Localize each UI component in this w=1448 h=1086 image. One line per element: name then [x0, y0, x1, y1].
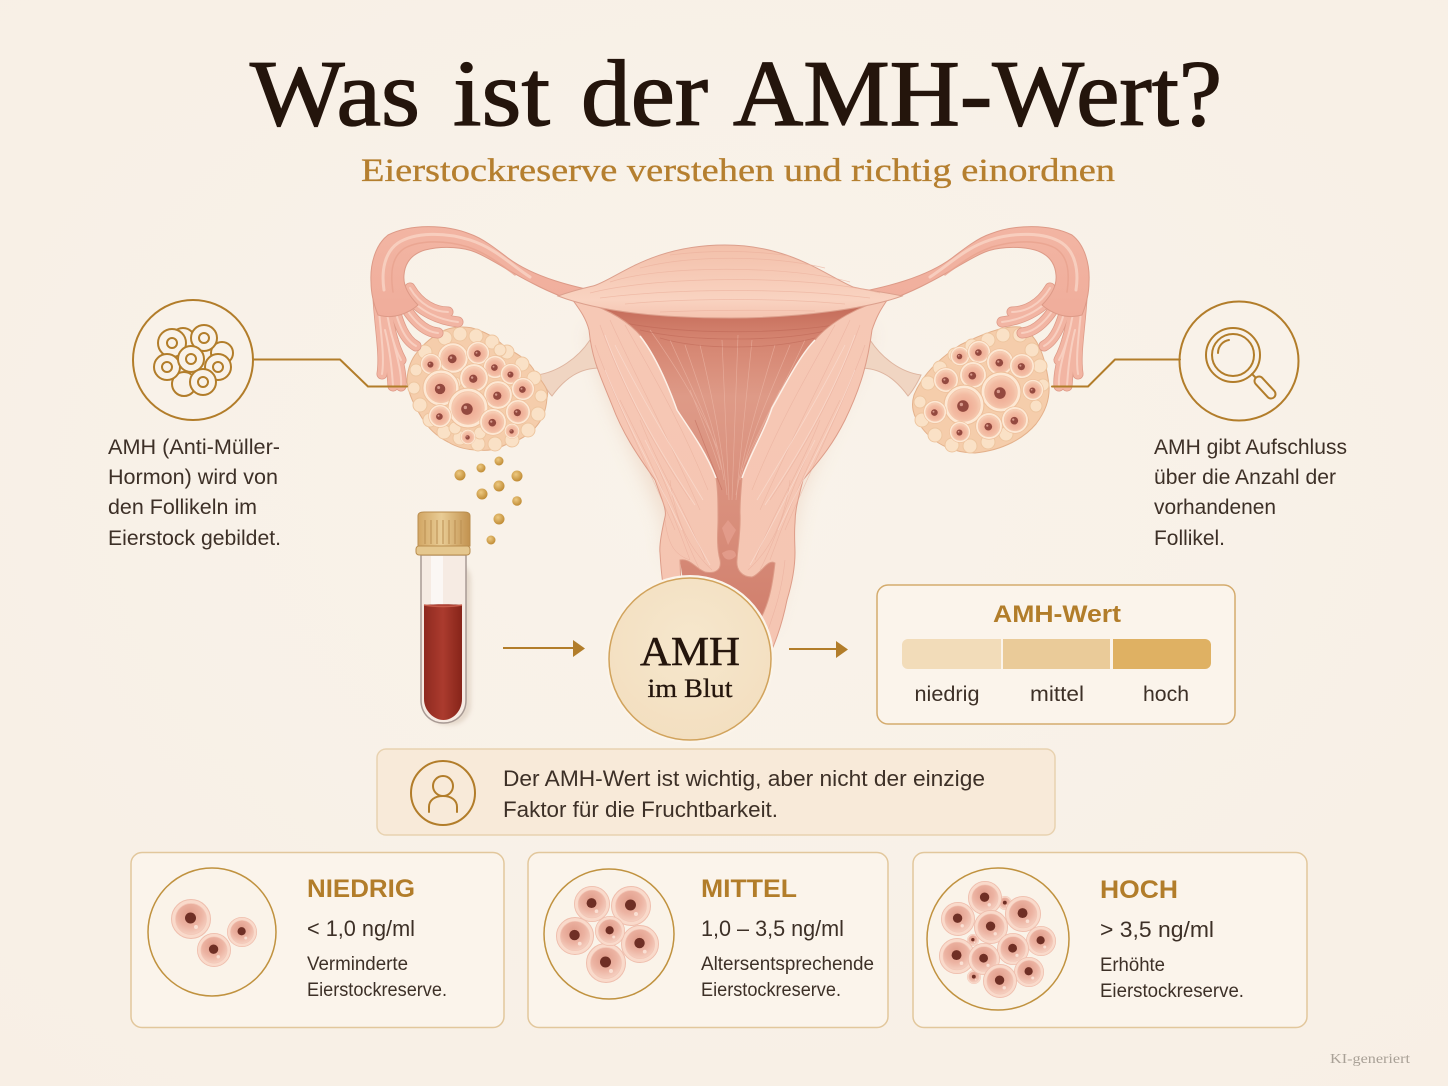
panel: hoch: Erhöhte	[1100, 955, 1165, 976]
panel: niedrig: Eierstockreserve.	[307, 980, 447, 1001]
left description	[108, 436, 281, 550]
left description: AMH (Anti-Müller-	[108, 436, 280, 459]
left description: den Follikeln im	[108, 496, 257, 519]
left fallopian tube	[371, 227, 600, 386]
panel: niedrig: < 1,0 ng/ml	[307, 916, 415, 941]
uterus illustration	[371, 227, 1089, 647]
right description	[1154, 436, 1347, 550]
title: ist	[453, 42, 550, 146]
scale bar	[902, 639, 1211, 669]
right description: über die Anzahl der	[1154, 466, 1336, 489]
panel: AMH-Wert scale: AMH-Wert	[993, 601, 1121, 628]
panel: hoch: HOCH	[1100, 876, 1178, 904]
follicle circle high	[927, 868, 1069, 1010]
panel: hoch	[913, 852, 1307, 1028]
panel: niedrig: NIEDRIG	[307, 875, 415, 903]
callout: AMH note: Der AMH-Wert ist wichtig, aber nicht der einzige	[503, 766, 985, 791]
AMH im Blut circle: AMH	[640, 628, 740, 674]
follicle circle medium	[544, 869, 674, 999]
panel: mittel: 1,0 – 3,5 ng/ml	[701, 916, 844, 941]
panel: AMH-Wert scale	[877, 585, 1235, 724]
panel: hoch: Eierstockreserve.	[1100, 981, 1244, 1002]
panel: mittel	[528, 852, 888, 1028]
arrow to AMH circle	[503, 640, 585, 657]
left ligament	[537, 340, 600, 396]
left connector line	[253, 360, 407, 386]
uterine cavity	[575, 297, 885, 630]
uterine fundus	[558, 245, 902, 318]
right description: Follikel.	[1154, 527, 1225, 550]
left ovary with follicles	[407, 327, 548, 451]
hormone dots	[454, 456, 522, 544]
title: der	[581, 42, 708, 146]
subtitle: Eierstockreserve verstehen und richtig einordnen	[361, 153, 1115, 189]
panel: mittel: Altersentsprechende	[701, 954, 874, 975]
left icon: follicle cluster	[133, 300, 253, 420]
left description: Eierstock gebildet.	[108, 527, 281, 550]
cavity fibre lines	[650, 330, 825, 500]
right ligament	[860, 340, 921, 396]
left description: Hormon) wird von	[108, 466, 278, 489]
wall muscle fibres	[595, 320, 865, 630]
right description: AMH gibt Aufschluss	[1154, 436, 1347, 459]
right uterine wall	[737, 299, 888, 647]
panel: AMH-Wert scale: hoch	[1143, 683, 1189, 706]
panel: niedrig: Verminderte	[307, 954, 408, 975]
panel: mittel: MITTEL	[701, 875, 797, 903]
panel: mittel: Eierstockreserve.	[701, 980, 841, 1001]
footer note: KI-generiert	[1330, 1052, 1410, 1067]
follicle circle low	[148, 868, 276, 996]
AMH im Blut circle: im Blut	[648, 674, 733, 703]
ovary follicles	[950, 346, 970, 366]
cervix canal	[722, 520, 736, 560]
AMH im Blut circle	[606, 575, 774, 743]
callout: AMH note	[377, 749, 1055, 835]
right description: vorhandenen	[1154, 496, 1276, 519]
left uterine wall	[572, 299, 720, 590]
panel: AMH-Wert scale: mittel	[1030, 683, 1084, 706]
title: Was	[250, 42, 420, 146]
icon: person	[411, 761, 475, 825]
inner wall highlights	[640, 336, 815, 478]
panel: niedrig	[131, 852, 504, 1028]
right icon: magnifying glass	[1180, 302, 1298, 420]
right connector line	[1052, 360, 1180, 386]
callout: AMH note: Faktor für die Fruchtbarkeit.	[503, 797, 778, 822]
right fallopian tube	[860, 227, 1089, 386]
test tube with blood	[416, 512, 471, 725]
panel: AMH-Wert scale: niedrig	[914, 683, 980, 706]
title: AMH-Wert?	[733, 42, 1222, 146]
title	[250, 42, 1222, 146]
ovary follicles	[438, 343, 468, 373]
right ovary with follicles	[913, 327, 1049, 453]
arrow to AMH scale	[789, 641, 848, 658]
fundus fibres	[590, 251, 880, 312]
panel: hoch: > 3,5 ng/ml	[1100, 917, 1214, 942]
